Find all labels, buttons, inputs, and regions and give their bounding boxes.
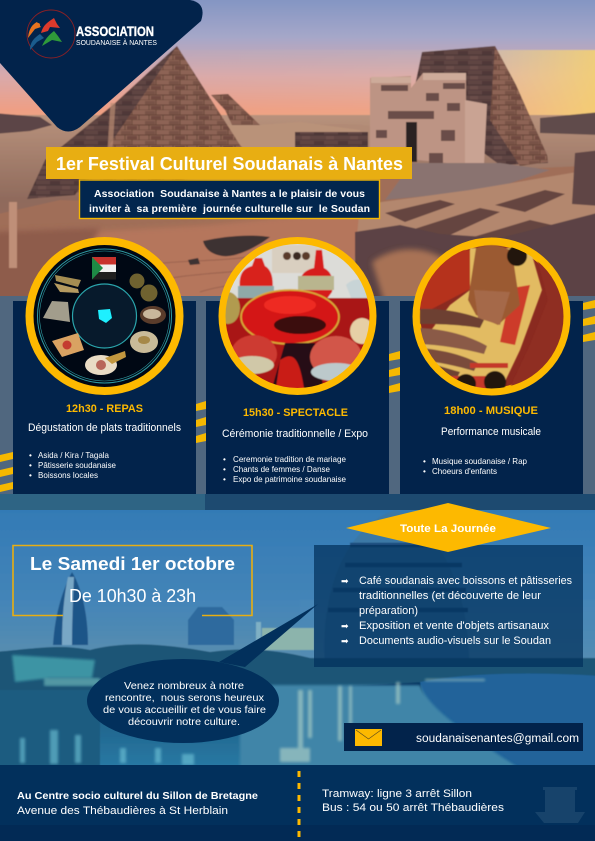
logo: association emblem [27,10,75,58]
list: spectacle: • [223,465,226,474]
list: musique [423,457,527,476]
list: musique: • [423,457,426,466]
list: all-day activities [341,575,572,647]
lower background photo: Khartoum by night [0,510,595,765]
diamond heading: Toute La Journée [400,523,496,535]
list: musique: Musique soudanaise / Rap [432,457,527,466]
list: all-day activities: Café soudanais avec boissons et pâtisseries [359,575,572,587]
title banner [46,147,412,179]
subtitle box [80,180,380,218]
speech bubble: Venez nombreux à notre [124,681,244,692]
list: spectacle: Expo de patrimoine soudanaise [233,475,346,484]
decorative yellow stripes [0,300,595,492]
logo panel [0,0,203,132]
icon: envelope [355,729,382,746]
slate band behind event panels [0,296,595,494]
list: all-day activities: ➡ [341,636,349,646]
panel: repas: Dégustation de plats traditionnels [28,422,182,434]
speech bubble: découvrir notre culture. [128,717,240,728]
panel: spectacle [206,240,389,494]
list: all-day activities: Documents audio-visuels sur le Soudan [359,635,551,647]
background photo: Meroe pyramids at sunset [0,0,595,305]
list: spectacle [223,455,346,484]
panel: musique: Performance musicale [441,426,541,438]
list: spectacle: Chants de femmes / Danse [233,465,330,474]
panel: musique: 18h00 - MUSIQUE [444,405,538,417]
list: all-day activities: Exposition et vente d'objets artisanaux [359,620,549,632]
list: repas: Asida / Kira / Tagala [38,451,109,460]
speech bubble: de vous accueillir et de vous faire [103,705,266,716]
footer [0,765,595,841]
date box: Le Samedi 1er octobre [30,554,235,574]
translucent strip under panels [0,494,595,510]
panel: spectacle: 15h30 - SPECTACLE [243,407,348,419]
email bar: soudanaisenantes@gmail.com [416,733,579,745]
diamond heading [346,503,551,552]
logo wordmark: SOUDANAISE À NANTES [76,38,157,47]
list: spectacle: • [223,455,226,464]
list: repas: • [29,471,32,480]
panel: toute la journée [314,545,583,667]
logo wordmark: ASSOCIATION [76,24,154,39]
icon: music circle [416,242,580,394]
dashed divider [298,771,300,841]
venue address: Au Centre socio culturel du Sillon de Bretagne [17,790,258,802]
date box: De 10h30 à 23h [69,586,196,606]
panel: repas: 12h30 - REPAS [66,403,143,415]
transport info: Tramway: ligne 3 arrêt Sillon [322,788,472,800]
icon: faint boat [535,787,585,823]
list: repas: • [29,461,32,470]
title banner: 1er Festival Culturel Soudanais à Nantes [56,153,403,174]
transport info: Bus : 54 ou 50 arrêt Thébaudières [322,802,505,814]
venue address [17,790,258,817]
list: repas [29,451,116,480]
list: all-day activities: traditionnelles (et découverte de leur [359,590,541,602]
panel: repas [13,241,196,494]
logo wordmark [76,24,157,47]
icon: crafts circle [216,240,382,395]
list: musique: • [423,467,426,476]
list: repas: Boissons locales [38,471,98,480]
speech bubble [87,604,318,743]
list: all-day activities: préparation) [359,605,418,617]
subtitle box: inviter à sa première journée culturelle sur le Soudan [89,203,370,215]
list: musique: Choeurs d'enfants [432,467,497,476]
list: repas: • [29,451,32,460]
email bar [344,723,583,751]
panel: musique [400,242,583,494]
icon: food circle [30,241,180,391]
transport info [322,788,505,814]
list: all-day activities: ➡ [341,621,349,631]
speech bubble: rencontre, nous serons heureux [105,693,265,704]
list: repas: Pâtisserie soudanaise [38,461,116,470]
panel: spectacle: Cérémonie traditionnelle / Expo [222,428,368,440]
venue address: Avenue des Thébaudières à St Herblain [17,805,228,817]
date box [13,546,252,616]
subtitle box: Association Soudanaise à Nantes a le plaisir de vous [94,188,365,200]
list: all-day activities: ➡ [341,576,349,586]
list: spectacle: • [223,475,226,484]
list: spectacle: Ceremonie tradition de mariage [233,455,346,464]
